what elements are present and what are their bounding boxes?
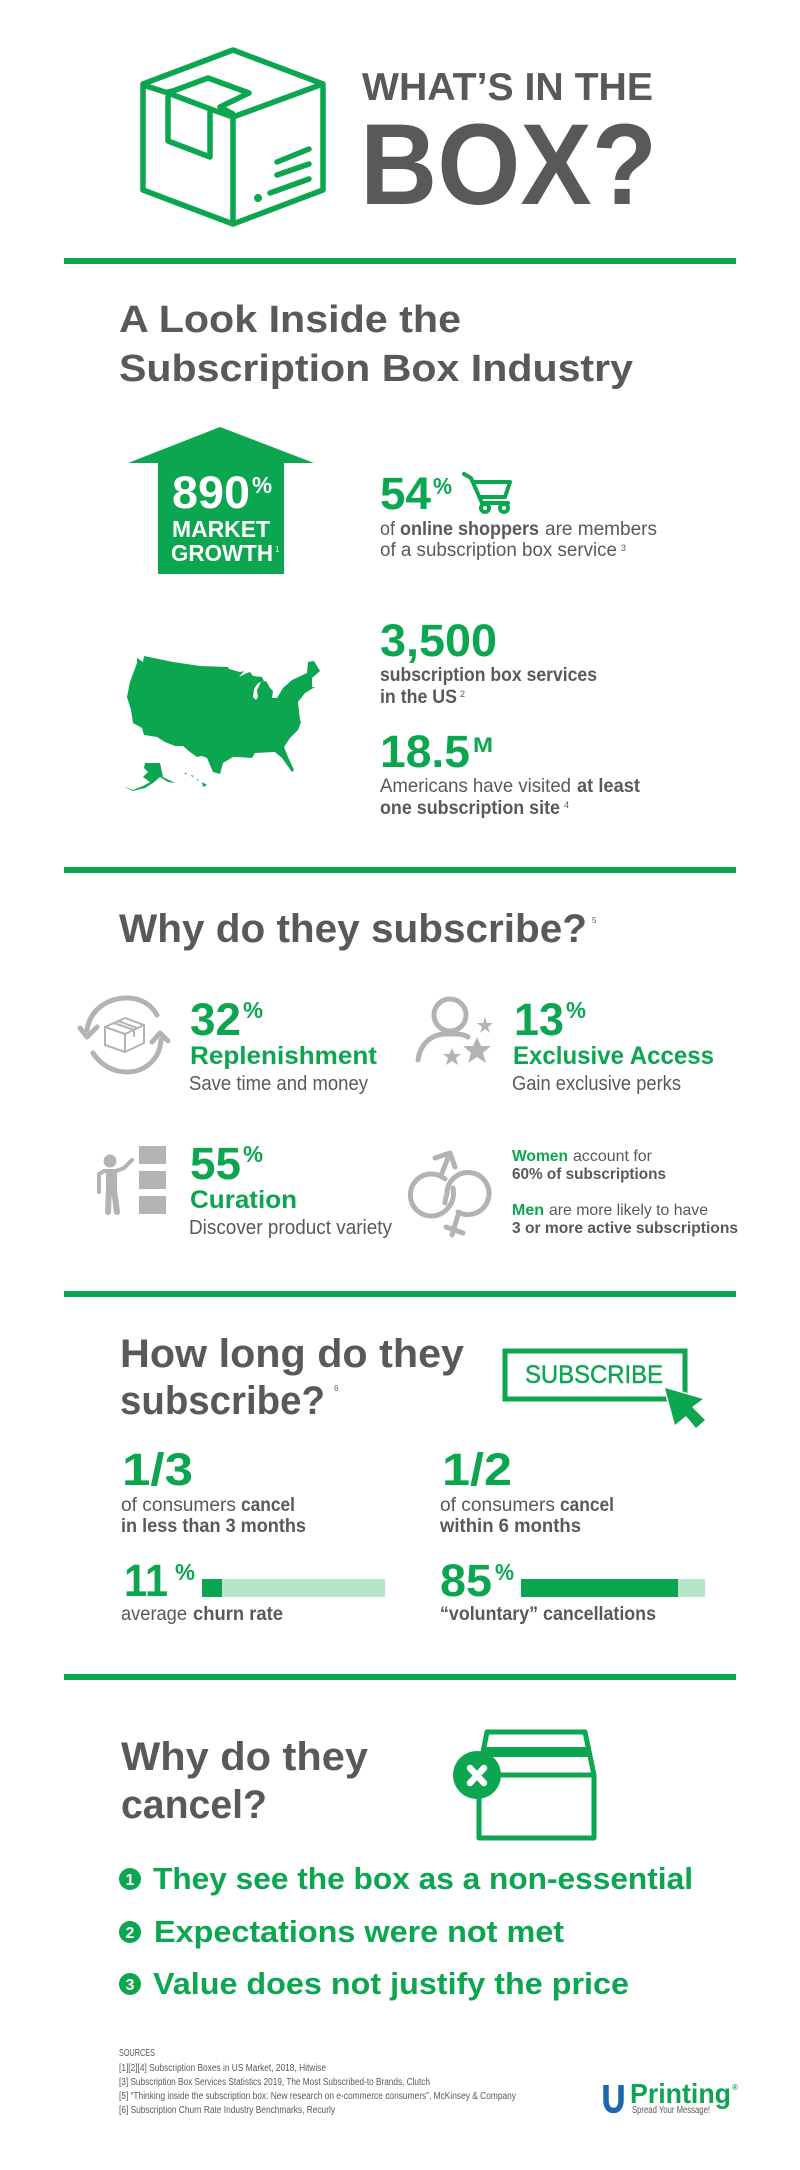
reason 2: Expectations were not met — [154, 1914, 564, 1949]
icon: refresh cycle with box — [80, 998, 168, 1072]
reason 3: Value does not justify the price — [153, 1966, 629, 2001]
panel: gender split: Men — [512, 1202, 544, 1219]
panel: gender split: 3 or more active subscriptions — [512, 1220, 738, 1237]
panel: replenishment: Save time and money — [189, 1073, 368, 1095]
sources: [5] “Thinking inside the subscription box: New research on e-commerce consumers”, McKinsey & Company — [119, 2091, 516, 2102]
heading: why subscribe: 5 — [592, 916, 597, 925]
panel: curation — [99, 1138, 392, 1239]
panel: gender split: 60% of subscriptions — [512, 1166, 666, 1183]
stat: 54 percent: 54 — [380, 468, 431, 519]
panel: exclusive access: % — [566, 997, 586, 1023]
panel: curation: 55 — [190, 1138, 241, 1189]
stat: one half cancel: cancel — [560, 1495, 614, 1516]
panel: exclusive access: Gain exclusive perks — [512, 1073, 681, 1095]
heading: industry — [119, 299, 633, 390]
heading: why cancel: Why do they — [121, 1735, 369, 1779]
logo: UPrinting — [606, 2078, 738, 2116]
stat: 54 percent: 3 — [621, 543, 626, 553]
heading: how long — [120, 1332, 465, 1423]
heading: how long: subscribe? — [120, 1379, 325, 1423]
chart: churn rate bar: 11 — [124, 1555, 168, 1606]
icon: shopping cart — [464, 474, 510, 512]
stat: one half cancel: of consumers — [440, 1495, 555, 1516]
heading: why cancel — [121, 1735, 369, 1827]
panel: market growth arrow — [128, 427, 314, 574]
panel: exclusive access: Exclusive Access — [513, 1042, 714, 1070]
panel: curation: % — [243, 1141, 263, 1167]
chart: churn rate bar: % — [175, 1559, 195, 1585]
panel: market growth arrow: % — [252, 472, 272, 498]
stat: one half cancel: 1/2 — [442, 1444, 512, 1495]
panel: gender split: account for — [573, 1148, 653, 1165]
chart: churn rate bar: average — [121, 1604, 187, 1625]
list: cancellation reasons — [119, 1861, 693, 2001]
panel: replenishment: Replenishment — [190, 1042, 378, 1070]
reason 1: 1 — [126, 1872, 135, 1889]
sources: [3] Subscription Box Services Statistics 2019, The Most Subscribed-to Brands, Clutch — [119, 2077, 430, 2088]
icon: box with cancel mark — [453, 1732, 594, 1838]
panel: gender split: Women — [512, 1148, 568, 1165]
stat: 54 percent — [380, 468, 657, 561]
panel: market growth arrow: MARKET — [172, 516, 270, 542]
heading: why cancel: cancel? — [121, 1783, 267, 1827]
panel: exclusive access — [418, 994, 714, 1095]
stat: 18.5M visitors: 4 — [564, 800, 569, 810]
stat: 54 percent: online shoppers — [400, 519, 539, 540]
sources: [1][2][4] Subscription Boxes in US Market, 2018, Hitwise — [119, 2063, 326, 2074]
icon: subscribe button with cursor: SUBSCRIBE — [525, 1361, 663, 1389]
reason 3: 3 — [126, 1977, 135, 1994]
stat: 3,500 services: 2 — [460, 689, 465, 699]
stat: 54 percent: of — [380, 519, 396, 540]
icon: person with stars — [418, 999, 493, 1065]
chart: voluntary cancellations bar: “voluntary” cancellations — [440, 1604, 656, 1625]
reason 2: 2 — [126, 1925, 135, 1942]
panel: curation: Discover product variety — [189, 1217, 392, 1239]
panel: header — [143, 50, 657, 229]
stat: 18.5M visitors — [380, 726, 641, 819]
panel: exclusive access: 13 — [514, 994, 564, 1045]
panel: curation: Curation — [190, 1186, 297, 1214]
stat: one half cancel — [439, 1444, 614, 1537]
heading: how long: How long do they — [120, 1332, 465, 1376]
panel: replenishment — [80, 994, 378, 1095]
panel: gender split: are more likely to have — [549, 1202, 708, 1219]
panel: replenishment: % — [243, 997, 263, 1023]
chart: voluntary cancellations bar: % — [495, 1559, 514, 1585]
stat: one third cancel: 1/3 — [122, 1444, 193, 1495]
logo: UPrinting: ® — [732, 2083, 738, 2092]
sources: SOURCES — [119, 2048, 155, 2059]
panel: gender split — [410, 1148, 738, 1237]
icon: person selecting blocks — [99, 1146, 166, 1214]
stat: 3,500 services: 3,500 — [380, 615, 497, 666]
stat: one third cancel — [121, 1444, 306, 1537]
stat: 3,500 services: subscription box services — [380, 665, 597, 686]
stat: 3,500 services — [380, 615, 597, 708]
icon: US map — [123, 656, 320, 791]
stat: 54 percent: % — [433, 473, 452, 499]
sources — [119, 2048, 516, 2116]
icon: subscribe button with cursor — [505, 1351, 705, 1428]
stat: 54 percent: of a subscription box service — [380, 540, 617, 561]
stat: 3,500 services: in the US — [380, 687, 457, 708]
heading: why subscribe: Why do they subscribe? — [119, 907, 587, 951]
stat: one third cancel: in less than 3 months — [121, 1516, 306, 1537]
icon: parcel box — [143, 50, 323, 224]
stat: 18.5M visitors: at least — [577, 776, 641, 797]
reason 1: They see the box as a non-essential — [153, 1861, 693, 1896]
chart: churn rate bar: churn rate — [193, 1604, 283, 1625]
icon: male and female symbols — [410, 1153, 489, 1235]
panel: market growth arrow: GROWTH — [171, 540, 273, 566]
stat: 54 percent: are members — [545, 519, 657, 540]
sources: [6] Subscription Churn Rate Industry Benchmarks, Recurly — [119, 2105, 335, 2116]
panel: market growth arrow: 1 — [275, 545, 280, 554]
title: BOX? — [360, 101, 657, 229]
chart: churn rate bar — [121, 1555, 385, 1625]
stat: one third cancel: of consumers — [121, 1495, 236, 1516]
panel: replenishment: 32 — [190, 994, 241, 1045]
panel: market growth arrow: 890 — [172, 467, 250, 518]
heading: industry: A Look Inside the — [119, 299, 461, 341]
chart: voluntary cancellations bar — [440, 1555, 705, 1625]
stat: 18.5M visitors: Americans have visited — [380, 776, 571, 797]
stat: 18.5M visitors: 18.5 — [380, 726, 470, 777]
stat: 18.5M visitors: M — [473, 734, 493, 757]
heading: industry: Subscription Box Industry — [119, 348, 633, 390]
stat: 18.5M visitors: one subscription site — [380, 798, 560, 819]
chart: voluntary cancellations bar: 85 — [440, 1555, 492, 1606]
stat: one third cancel: cancel — [241, 1495, 295, 1516]
logo: UPrinting: Spread Your Message! — [632, 2105, 710, 2116]
stat: one half cancel: within 6 months — [439, 1516, 581, 1537]
logo: UPrinting: Printing — [630, 2078, 731, 2109]
heading: how long: 6 — [334, 1384, 339, 1393]
title: WHAT’S IN THE — [362, 66, 653, 109]
